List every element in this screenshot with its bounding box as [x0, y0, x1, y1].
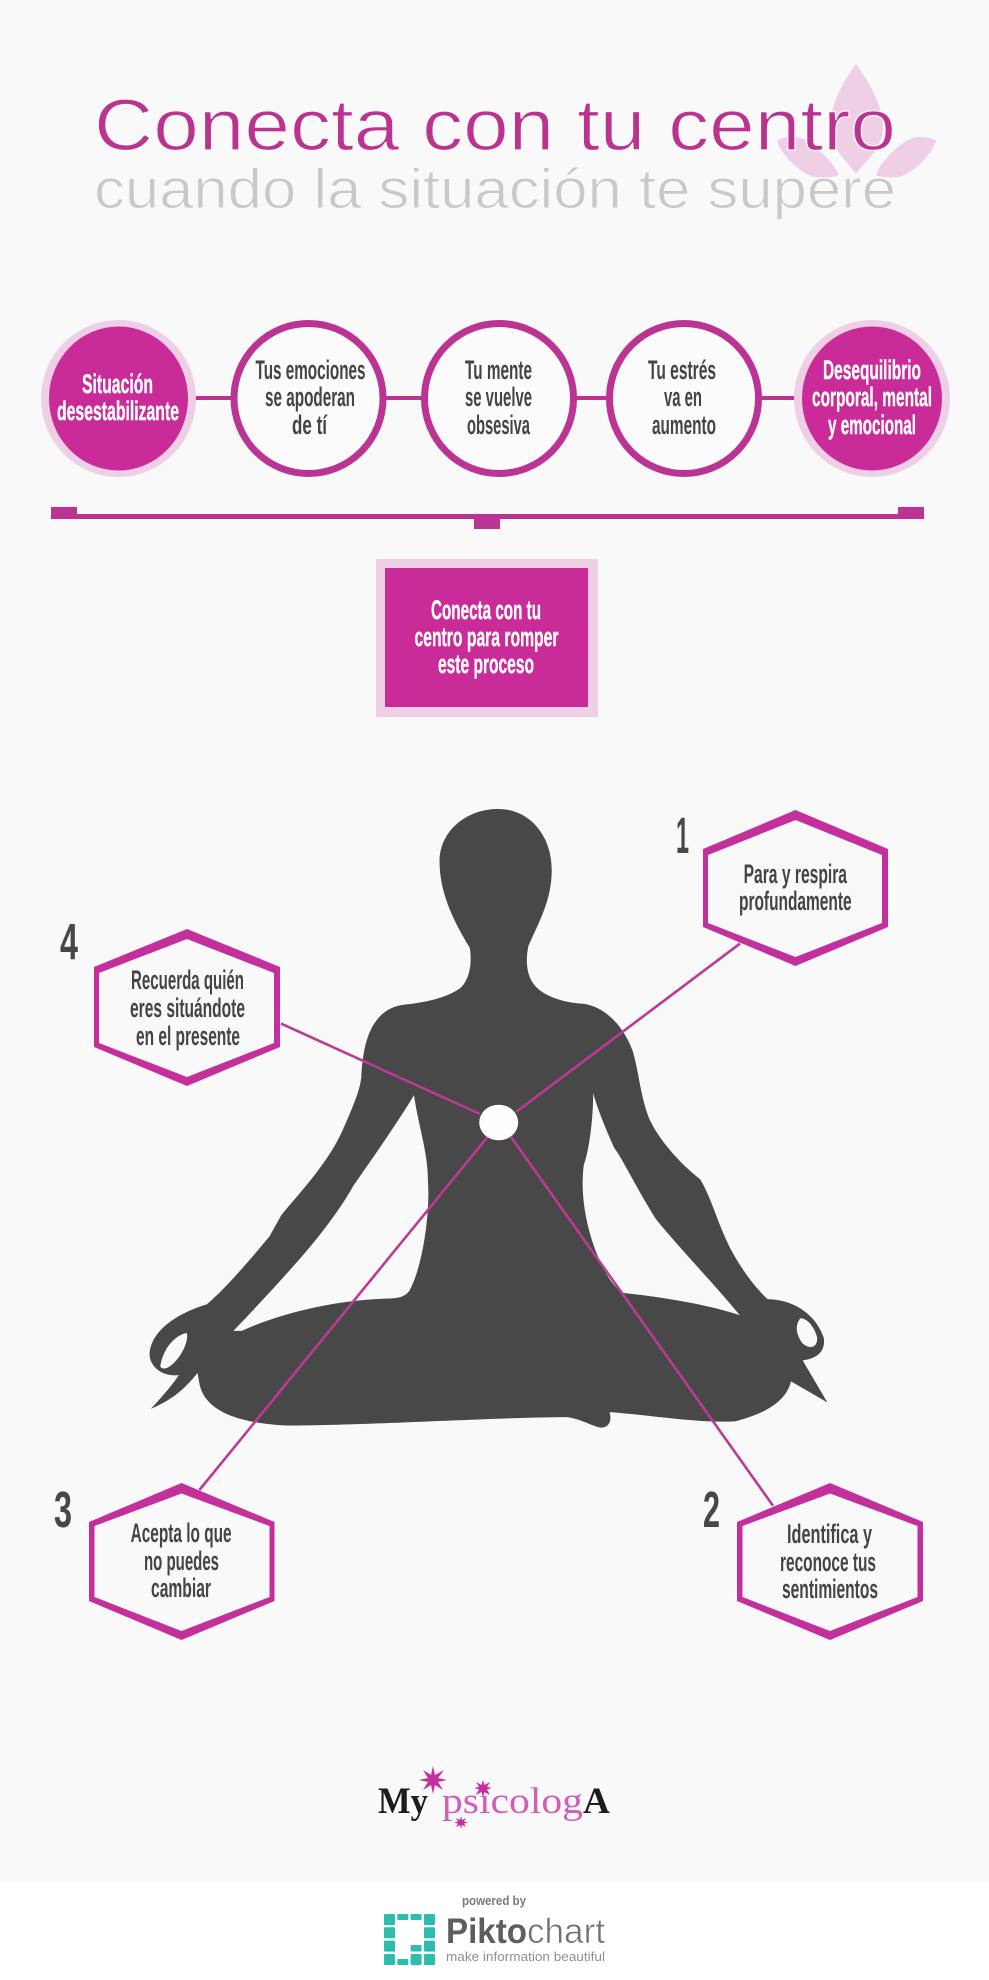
circle: tu mente: Tu mente: [465, 355, 532, 385]
circle: tus emociones: de tí: [292, 410, 328, 440]
circle: situación desestabilizante: Situación: [82, 369, 153, 399]
step 4: en el presente: [136, 1021, 240, 1051]
hexagon 4: [94, 929, 280, 1086]
hexagon 3: [89, 1483, 274, 1640]
step 4: eres situándote: [130, 993, 245, 1023]
center point: [479, 1105, 518, 1140]
wordmark: piktochart: Pikto: [446, 1912, 527, 1951]
circle: tu estrés: [610, 324, 758, 474]
logo: My psicologA: My: [378, 1781, 428, 1822]
logo: My psicologA: psicolog: [442, 1781, 583, 1822]
circle: tu mente: [424, 324, 574, 474]
step 3: no puedes: [144, 1546, 219, 1576]
circle: tu estrés: aumento: [652, 410, 716, 440]
connector lines: [199, 944, 773, 1506]
icon: lotus: [777, 64, 936, 177]
circle: tu mente: obsesiva: [467, 410, 531, 440]
footer: powered by: powered by: [462, 1893, 527, 1908]
circle: tus emociones: Tus emociones: [256, 355, 366, 385]
circle: desequilibrio: Desequilibrio: [823, 355, 921, 385]
circle: desequilibrio: y emocional: [828, 410, 916, 440]
circle: situación desestabilizante: [41, 320, 196, 477]
callout: conecta con tu centro: Conecta con tu: [431, 595, 541, 625]
bracket bar: [51, 507, 924, 529]
circle: tus emociones: [234, 324, 383, 474]
callout: conecta con tu centro: [376, 559, 598, 717]
logo: My psicologA: A: [583, 1781, 610, 1822]
circle: tu estrés: Tu estrés: [648, 355, 716, 385]
subtitle: cuando la situación te supere: [94, 157, 896, 220]
step 1: 1: [676, 807, 689, 864]
step 2: sentimientos: [782, 1574, 878, 1604]
step 2: reconoce tus: [780, 1547, 876, 1577]
callout: conecta con tu centro: centro para romper: [414, 622, 559, 652]
hexagon 2: [737, 1483, 923, 1640]
circle: tu estrés: va en: [664, 382, 702, 412]
circle: desequilibrio: [794, 320, 950, 477]
circle: tu mente: se vuelve: [465, 382, 532, 412]
number 4: 4: [60, 913, 78, 970]
title: Conecta con tu centro: [94, 86, 896, 166]
step 3: [54, 1481, 274, 1640]
callout: conecta con tu centro: este proceso: [438, 649, 534, 679]
icon: piktochart grid: [384, 1914, 435, 1965]
number 3: 3: [54, 1481, 72, 1538]
logo: My psicologA: [378, 1766, 610, 1829]
step 1 text: Para y respira: [744, 859, 848, 889]
step 2: [703, 1481, 923, 1640]
silhouette: meditating figure: [150, 809, 827, 1428]
step 1: profundamente: [739, 886, 852, 916]
wordmark: piktochart: chart: [527, 1912, 605, 1951]
step 4 text: Recuerda quién: [131, 965, 244, 995]
step 2 text: Identifica y: [787, 1519, 872, 1549]
circle: tus emociones: se apoderan: [265, 382, 355, 412]
step 1: [676, 807, 888, 966]
step 3 text: Acepta lo que: [131, 1518, 232, 1548]
process chain connectors: [190, 396, 798, 400]
circle: situación desestabilizante: desestabilizante: [57, 396, 179, 426]
step 3: cambiar: [151, 1573, 211, 1603]
wordmark: piktochart: [446, 1912, 605, 1964]
wordmark: piktochart: make information beautiful: [446, 1949, 605, 1964]
hexagon 1: [703, 810, 888, 966]
number 2: 2: [703, 1481, 720, 1538]
title: [94, 86, 896, 220]
step 4: [60, 913, 280, 1086]
